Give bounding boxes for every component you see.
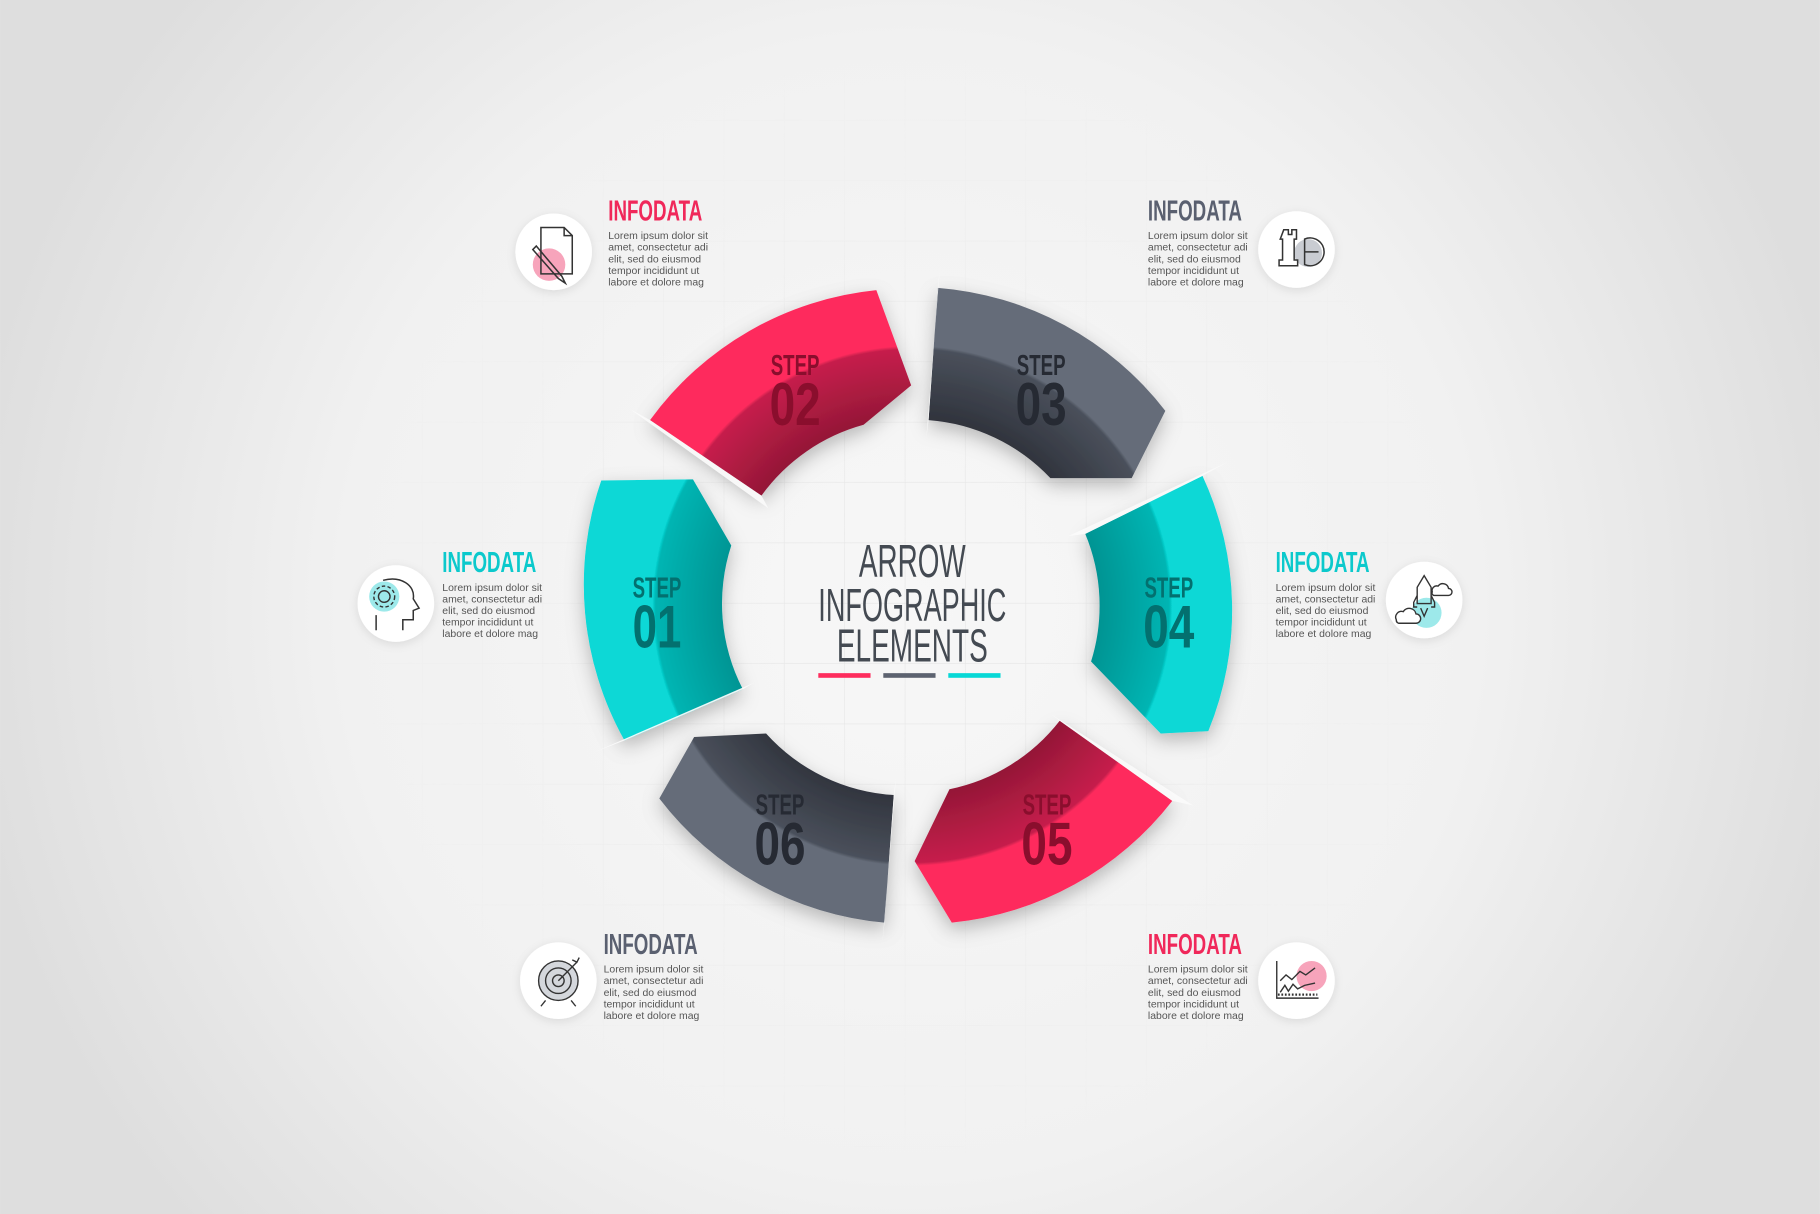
step labels: STEP: [771, 350, 819, 382]
step labels: [633, 350, 1195, 878]
info: top-left: amet, consectetur adi: [608, 243, 708, 254]
info: middle-left: amet, consectetur adi: [442, 594, 542, 605]
info: bottom-right: tempor incididunt ut: [1148, 999, 1239, 1010]
info: middle-left: elit, sed do eiusmod: [442, 606, 535, 617]
info: middle-right: amet, consectetur adi: [1276, 594, 1375, 605]
ring segments: [584, 288, 1232, 923]
info: bottom-right: Lorem ipsum dolor sit: [1148, 965, 1248, 976]
info: bottom-left: tempor incididunt ut: [604, 999, 695, 1010]
center title: ARROW: [859, 535, 966, 587]
info: top-right: [1148, 196, 1335, 289]
info: middle-right: INFODATA: [1276, 547, 1370, 579]
step labels: 03: [1016, 370, 1067, 438]
info: middle-right: tempor incididunt ut: [1276, 618, 1367, 629]
info: top-left: elit, sed do eiusmod: [608, 254, 701, 265]
info: middle-left: tempor incididunt ut: [442, 618, 533, 629]
step labels: STEP: [1023, 790, 1071, 822]
step labels: 04: [1143, 593, 1195, 661]
info: bottom-left: elit, sed do eiusmod: [604, 988, 697, 999]
segment: step 01: [584, 479, 743, 740]
info: middle-right: [1276, 547, 1462, 640]
info: middle-left: INFODATA: [442, 547, 536, 579]
info: bottom-left: Lorem ipsum dolor sit: [604, 965, 703, 976]
info: top-right: amet, consectetur adi: [1148, 243, 1248, 254]
info: bottom-right: elit, sed do eiusmod: [1148, 988, 1241, 999]
step labels: STEP: [1144, 573, 1193, 605]
info: top-left: labore et dolore mag: [608, 278, 704, 289]
step labels: STEP: [756, 790, 804, 822]
step labels: STEP: [633, 573, 681, 605]
step labels: 06: [754, 810, 806, 878]
info: bottom-left: INFODATA: [604, 929, 698, 961]
segment: step 04: [1085, 476, 1232, 734]
info: bottom-left: [520, 929, 703, 1022]
step labels: 05: [1021, 810, 1072, 878]
info: middle-right: elit, sed do eiusmod: [1276, 606, 1369, 617]
segment: step 05: [915, 721, 1172, 923]
info: top-left: tempor incididunt ut: [608, 266, 699, 277]
segment: step 06: [659, 734, 894, 923]
info: top-right: INFODATA: [1148, 196, 1242, 228]
info: bottom-right: [1148, 929, 1335, 1022]
info: top-right: labore et dolore mag: [1148, 278, 1244, 289]
segment: step 03: [929, 288, 1165, 478]
info: bottom-right: amet, consectetur adi: [1148, 976, 1248, 987]
step labels: 01: [633, 593, 681, 661]
step labels: 02: [770, 370, 821, 438]
info: top-left: [515, 196, 708, 290]
center title: [818, 535, 1006, 678]
info: middle-right: Lorem ipsum dolor sit: [1276, 583, 1375, 594]
info: top-left: Lorem ipsum dolor sit: [608, 231, 708, 242]
info: bottom-left: amet, consectetur adi: [604, 976, 703, 987]
info: middle-left: labore et dolore mag: [442, 629, 538, 640]
info: bottom-left: labore et dolore mag: [604, 1011, 700, 1022]
info: middle-right: labore et dolore mag: [1276, 629, 1372, 640]
segment: step 02: [650, 290, 911, 496]
info: middle-left: Lorem ipsum dolor sit: [442, 583, 542, 594]
info: top-right: elit, sed do eiusmod: [1148, 254, 1241, 265]
info: middle-left: [358, 547, 542, 642]
center title: INFOGRAPHIC: [818, 579, 1006, 631]
center title: ELEMENTS: [837, 620, 988, 672]
info: top-left: INFODATA: [608, 196, 702, 228]
info: bottom-right: INFODATA: [1148, 929, 1242, 961]
step labels: STEP: [1017, 350, 1066, 382]
info: top-right: Lorem ipsum dolor sit: [1148, 231, 1248, 242]
info: bottom-right: labore et dolore mag: [1148, 1011, 1244, 1022]
info: top-right: tempor incididunt ut: [1148, 266, 1239, 277]
